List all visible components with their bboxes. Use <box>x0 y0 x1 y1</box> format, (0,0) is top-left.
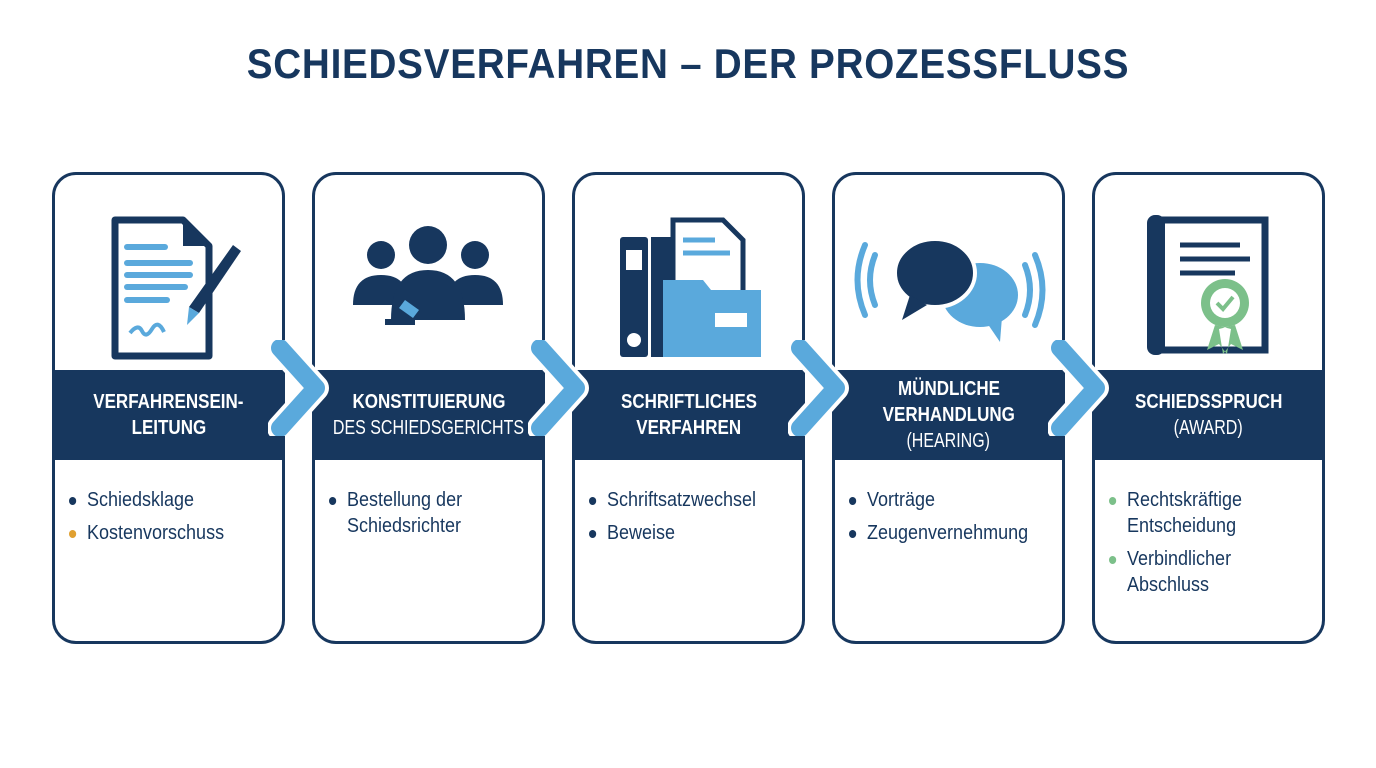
band title <box>575 370 802 460</box>
title: SCHIEDSVERFAHREN – DER PROZESSFLUSS <box>247 40 1129 87</box>
bullet list: Bestellung der <box>347 489 462 511</box>
bullet list <box>69 489 224 544</box>
bullet list: Entscheidung <box>1127 515 1236 537</box>
icon: people with gavel <box>353 226 503 325</box>
bullet list: Beweise <box>607 522 675 544</box>
band title: KONSTITUIERUNG <box>352 391 505 413</box>
icon: binders and folder <box>620 218 761 357</box>
icon: document with pen <box>112 216 241 360</box>
bullet list: Zeugenvernehmung <box>867 522 1028 544</box>
bullet list <box>849 489 1028 544</box>
band title <box>55 370 282 460</box>
band title: DES SCHIEDSGERICHTS <box>333 417 524 439</box>
arrow 2 <box>528 340 589 436</box>
band title <box>835 370 1062 460</box>
panel: step 1 <box>52 172 285 644</box>
bullet list: Vorträge <box>867 489 935 511</box>
arrow 3 <box>788 340 849 436</box>
bullet list: Abschluss <box>1127 574 1209 596</box>
bullet list <box>1109 489 1242 596</box>
panel: step 5 <box>1092 172 1325 644</box>
bullet list <box>329 489 462 537</box>
band title: SCHRIFTLICHES <box>620 391 756 413</box>
band title: LEITUNG <box>131 417 206 439</box>
panel: step 2 <box>312 172 545 644</box>
bullet list <box>589 489 756 544</box>
icon: speech bubbles <box>854 241 1046 342</box>
bullet list: Schiedsrichter <box>347 515 461 537</box>
band title: VERFAHREN <box>636 417 741 439</box>
bullet list: Kostenvorschuss <box>87 522 224 544</box>
band title: VERHANDLUNG <box>882 404 1015 426</box>
band title <box>1095 370 1322 460</box>
panel: step 4 <box>832 172 1065 644</box>
bullet list: Schiedsklage <box>87 489 194 511</box>
bullet list: Verbindlicher <box>1127 548 1231 570</box>
band title: (AWARD) <box>1174 417 1243 439</box>
band title: (HEARING) <box>907 430 990 452</box>
arrow 4 <box>1048 340 1109 436</box>
bullet list: Rechtskräftige <box>1127 489 1242 511</box>
bullet list: Schriftsatzwechsel <box>607 489 756 511</box>
band title: SCHIEDSSPRUCH <box>1135 391 1282 413</box>
arrow 1 <box>268 340 329 436</box>
panel: step 3 <box>572 172 805 644</box>
band title: MÜNDLICHE <box>898 378 1000 400</box>
icon: award scroll <box>1147 215 1268 355</box>
band title: VERFAHRENSEIN- <box>93 391 244 413</box>
band title <box>315 370 542 460</box>
